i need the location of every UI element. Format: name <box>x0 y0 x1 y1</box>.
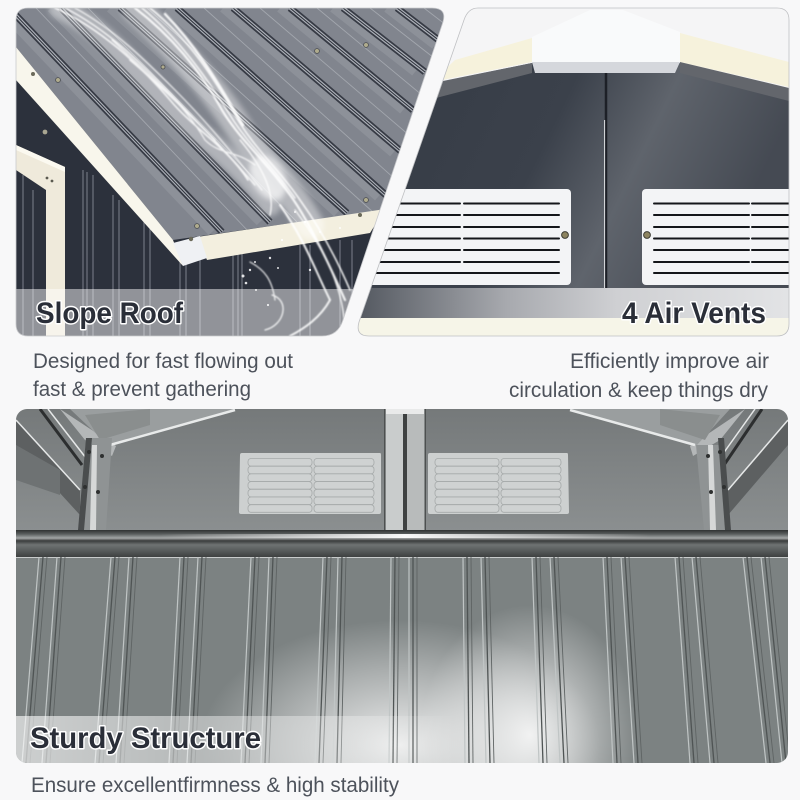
interior left vent <box>239 453 381 514</box>
left roof frame <box>16 409 235 515</box>
caption band <box>16 716 456 763</box>
translucent caption band <box>16 289 361 336</box>
upper interior wall <box>16 409 788 531</box>
water stream flowing down the roof <box>55 8 350 336</box>
panel: 4 air vents <box>358 33 789 336</box>
right metal bracket <box>696 438 731 530</box>
panel: sturdy structure <box>16 409 790 800</box>
door seam <box>605 73 606 318</box>
water droplets <box>242 211 341 306</box>
cream bottom trim <box>350 318 795 336</box>
text: slope roof description: Designed for fast flowing out <box>33 350 293 373</box>
left air vent <box>372 189 571 285</box>
corrugated roof <box>16 8 444 240</box>
caption band <box>350 288 795 318</box>
icon: roof screws <box>56 43 368 228</box>
grey gutter <box>436 62 789 101</box>
icon: vent screw <box>644 232 650 238</box>
heading: Slope Roof: Slope Roof <box>36 297 184 330</box>
right air vent <box>642 189 800 285</box>
text: air vents description: Efficiently improve air <box>570 350 769 373</box>
ridge cap <box>532 62 680 73</box>
cream door frame <box>16 145 65 336</box>
left metal bracket <box>78 438 112 530</box>
lower ribbed wall <box>16 556 788 763</box>
text: slope roof description: fast & prevent gathering <box>33 378 251 401</box>
heading: 4 Air Vents: 4 Air Vents <box>622 297 766 330</box>
dark shed wall <box>350 63 789 288</box>
icon: vent screw <box>562 232 568 238</box>
wall below the roof <box>16 47 374 336</box>
text: slope roof description <box>33 350 293 401</box>
heading: Sturdy Structure: Sturdy Structure <box>30 722 261 755</box>
text: sturdy structure description: Ensure excellentfirmness & high stability <box>31 774 399 797</box>
text: air vents description <box>509 350 769 402</box>
right roof frame <box>570 409 788 515</box>
white roof eaves <box>16 47 385 266</box>
panel outline <box>16 8 444 336</box>
interior right vent <box>428 453 569 514</box>
horizontal metal beam <box>16 530 788 558</box>
central post <box>384 409 426 531</box>
icon: wall screw <box>43 130 47 134</box>
panel outline <box>358 8 789 336</box>
cream roof trim <box>432 33 789 87</box>
panel: slope roof <box>0 8 472 336</box>
text: air vents description: circulation & keep things dry <box>509 379 768 402</box>
